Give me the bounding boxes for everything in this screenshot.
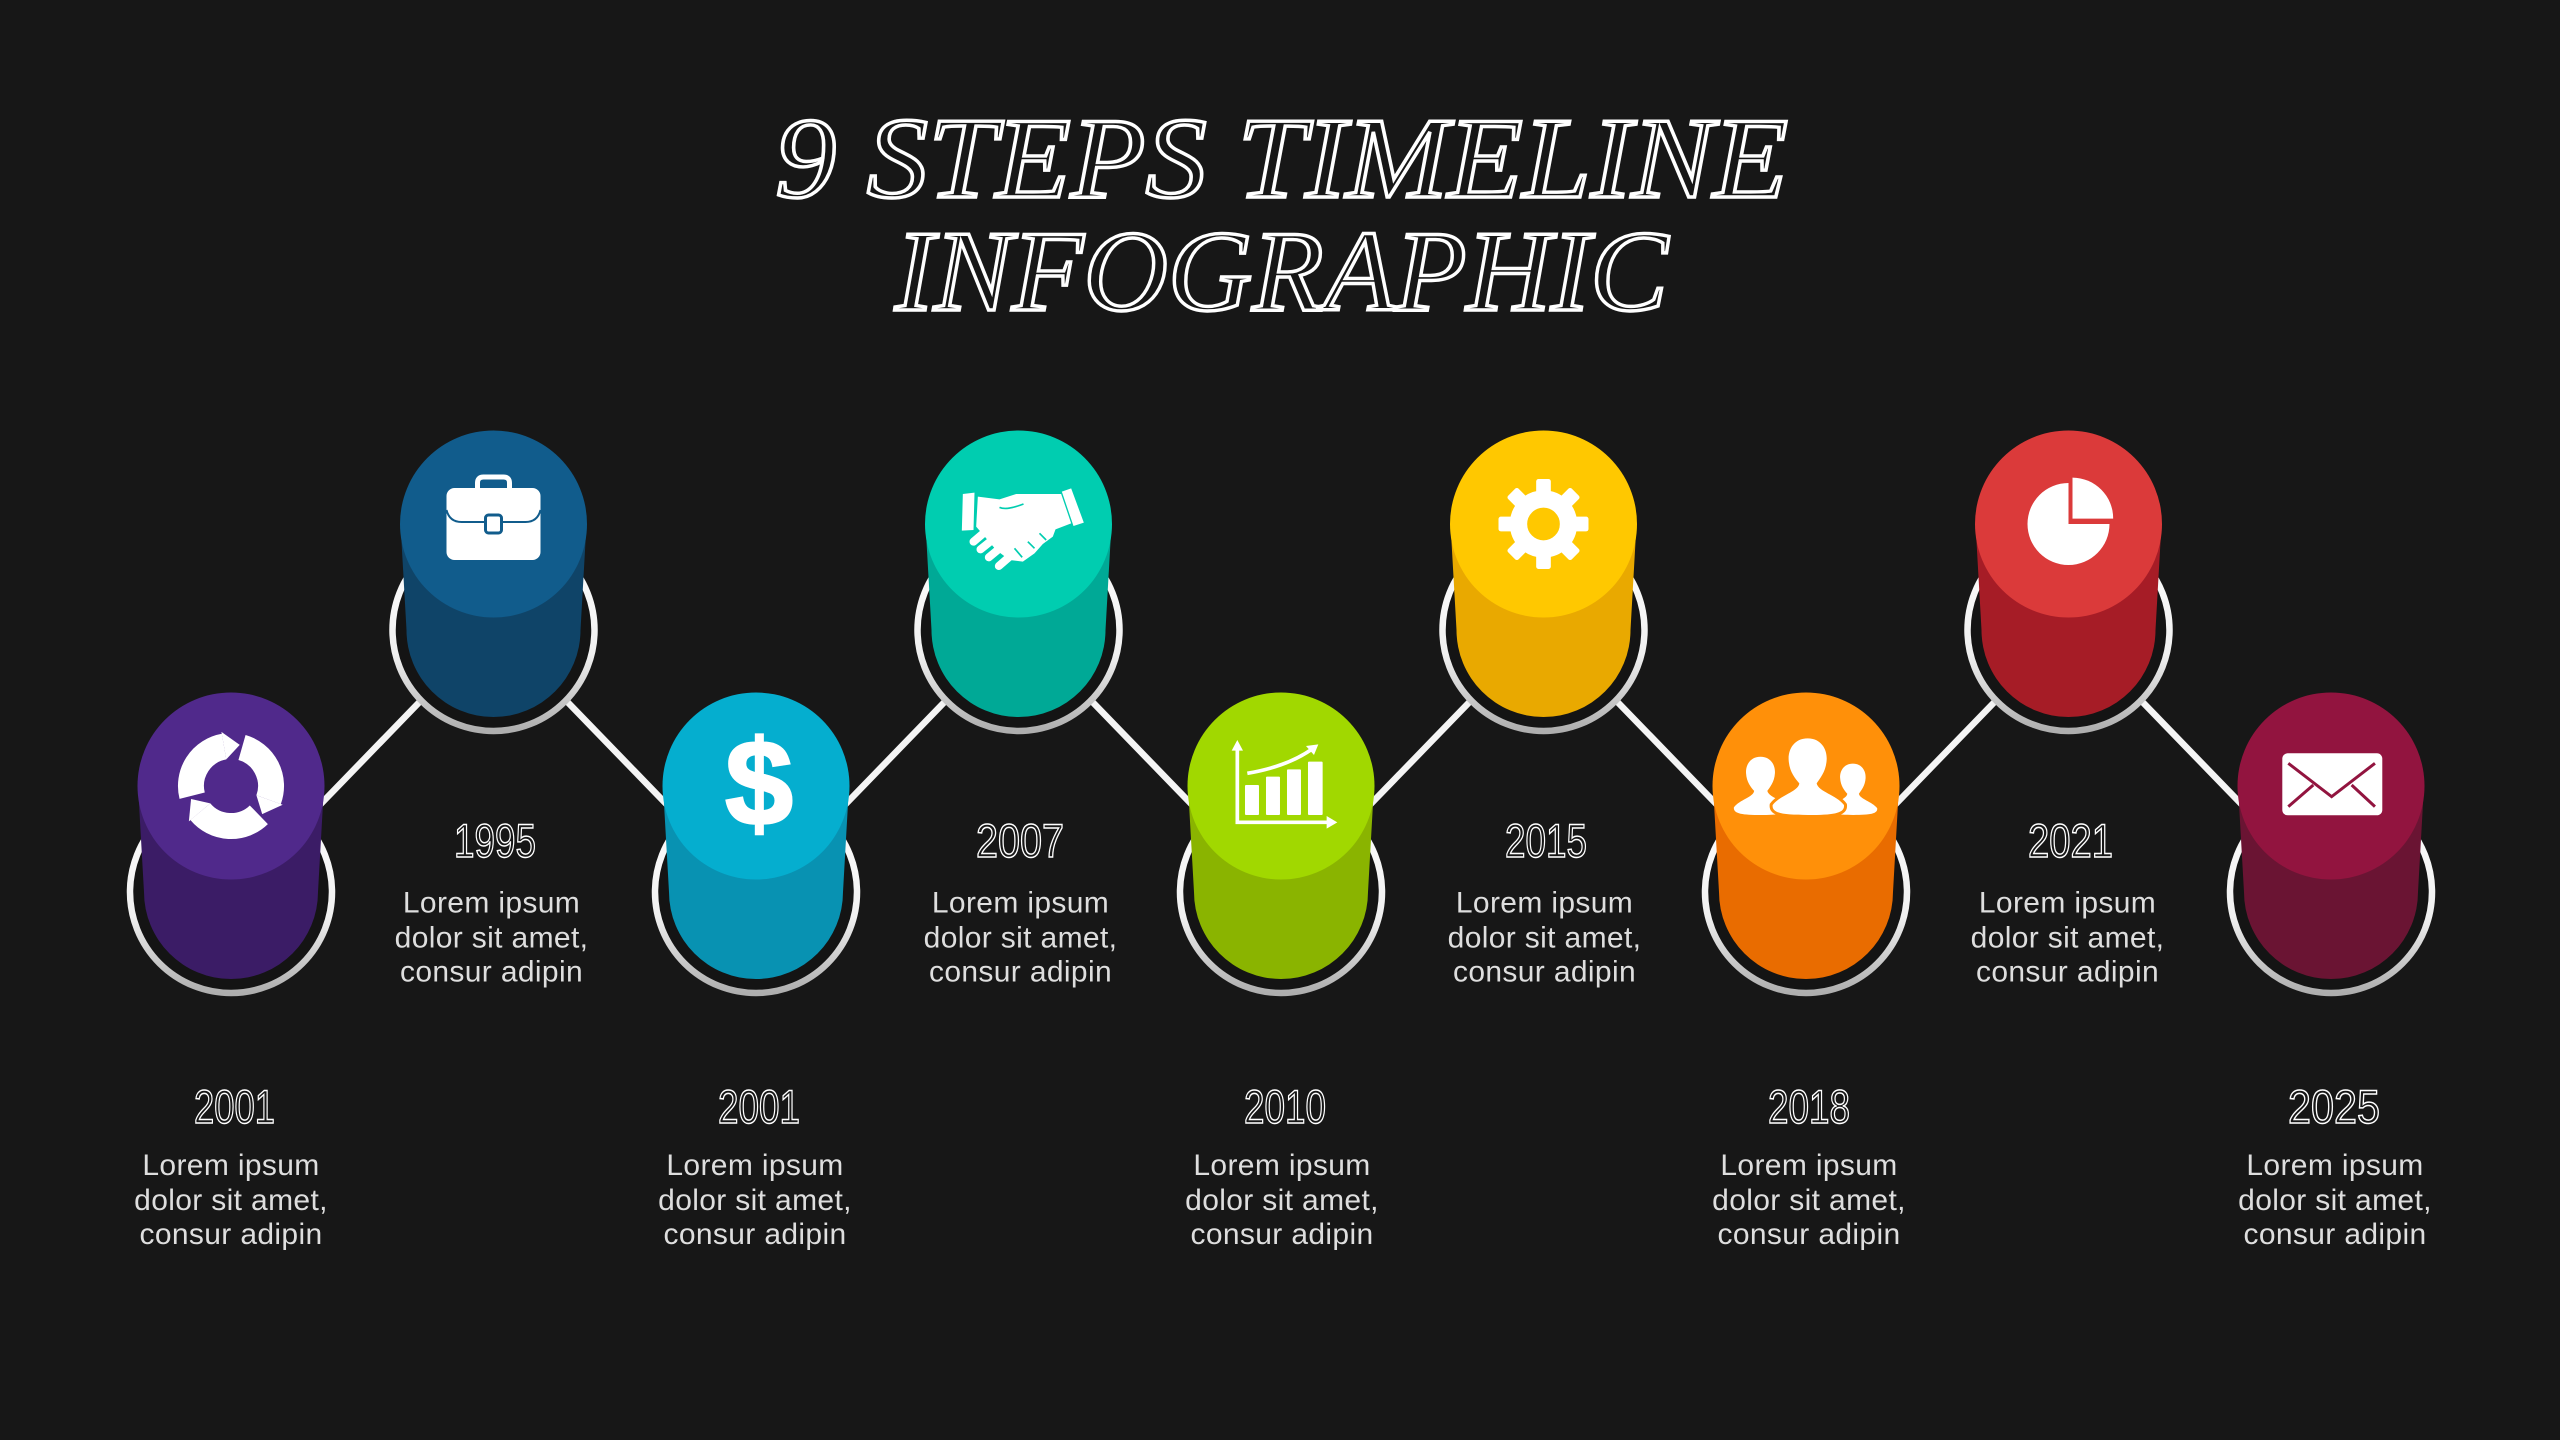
node 9: maroon cylinder: [2230, 692, 2432, 993]
step 3 text: 2001: [718, 1080, 800, 1133]
step 2 text: [395, 814, 588, 988]
step 9 text: Lorem ipsum: [2246, 1149, 2424, 1182]
step 8 text: consur adipin: [1976, 956, 2159, 988]
step 3 text: dolor sit amet,: [658, 1184, 852, 1217]
step 6 text: Lorem ipsum: [1456, 886, 1633, 920]
step 2 text: consur adipin: [400, 956, 583, 988]
node 3: cyan cylinder: [655, 692, 857, 993]
step 8 text: dolor sit amet,: [1971, 922, 2164, 954]
step 5 text: dolor sit amet,: [1185, 1184, 1379, 1217]
step 7 text: Lorem ipsum: [1720, 1149, 1898, 1182]
node 7: orange cylinder: [1705, 692, 1907, 993]
step 3 text: consur adipin: [664, 1218, 846, 1251]
step 1 text: Lorem ipsum: [142, 1149, 320, 1182]
icon: gear: [1499, 479, 1588, 569]
step 3 text: [658, 1080, 852, 1251]
step 4 text: consur adipin: [929, 956, 1112, 988]
step 4 text: dolor sit amet,: [924, 922, 1117, 954]
step 4 text: [924, 814, 1117, 988]
node 6: yellow cylinder: [1442, 430, 1644, 731]
step 2 text: dolor sit amet,: [395, 922, 588, 954]
step 6 text: dolor sit amet,: [1448, 922, 1641, 954]
step 8 text: [1971, 814, 2164, 988]
step 9 text: consur adipin: [2244, 1218, 2426, 1251]
step 6 text: [1448, 814, 1641, 988]
node 4: teal cylinder: [918, 430, 1120, 731]
node 5: green cylinder: [1180, 692, 1382, 993]
zigzag connector lines: [313, 702, 2249, 812]
step 6 text: 2015: [1505, 814, 1587, 867]
icon: pie chart: [2028, 478, 2113, 565]
step 5 text: [1185, 1080, 1379, 1251]
step 7 text: 2018: [1768, 1080, 1850, 1133]
step 4 text: 2007: [976, 814, 1064, 867]
step 1 text: dolor sit amet,: [134, 1184, 328, 1217]
title: 9 STEPS TIMELINE: [775, 95, 1788, 223]
step 7 text: [1712, 1080, 1906, 1251]
step 1 text: 2001: [194, 1080, 275, 1133]
icon: handshake: [962, 488, 1084, 566]
node 8: red cylinder: [1968, 430, 2170, 731]
icon: recycle arrows: [172, 727, 283, 850]
step 4 text: Lorem ipsum: [932, 886, 1109, 920]
step 8 text: 2021: [2028, 814, 2113, 867]
step 8 text: Lorem ipsum: [1979, 886, 2156, 920]
node 2: blue cylinder: [392, 430, 594, 731]
step 5 text: consur adipin: [1190, 1218, 1374, 1251]
node 1: purple cylinder: [130, 692, 332, 993]
step 1 text: consur adipin: [140, 1218, 322, 1251]
step 1 text: [134, 1080, 328, 1251]
step 5 text: Lorem ipsum: [1193, 1149, 1371, 1182]
step 5 text: 2010: [1244, 1080, 1326, 1133]
step 7 text: consur adipin: [1718, 1218, 1900, 1251]
icon: envelope: [2282, 753, 2382, 815]
step 7 text: dolor sit amet,: [1712, 1184, 1906, 1217]
icon: three people: [1734, 738, 1877, 815]
step 9 text: [2238, 1080, 2432, 1251]
step 9 text: 2025: [2288, 1080, 2380, 1133]
step 2 text: 1995: [454, 814, 536, 867]
icon: bar chart: [1232, 740, 1337, 829]
step 3 text: Lorem ipsum: [666, 1149, 844, 1182]
icon: briefcase: [446, 477, 540, 560]
step 6 text: consur adipin: [1453, 956, 1636, 988]
step 9 text: dolor sit amet,: [2238, 1184, 2432, 1217]
step 2 text: Lorem ipsum: [403, 886, 580, 920]
title: INFOGRAPHIC: [894, 208, 1670, 336]
title: [775, 95, 1788, 336]
icon: dollar sign: $: [725, 715, 793, 851]
